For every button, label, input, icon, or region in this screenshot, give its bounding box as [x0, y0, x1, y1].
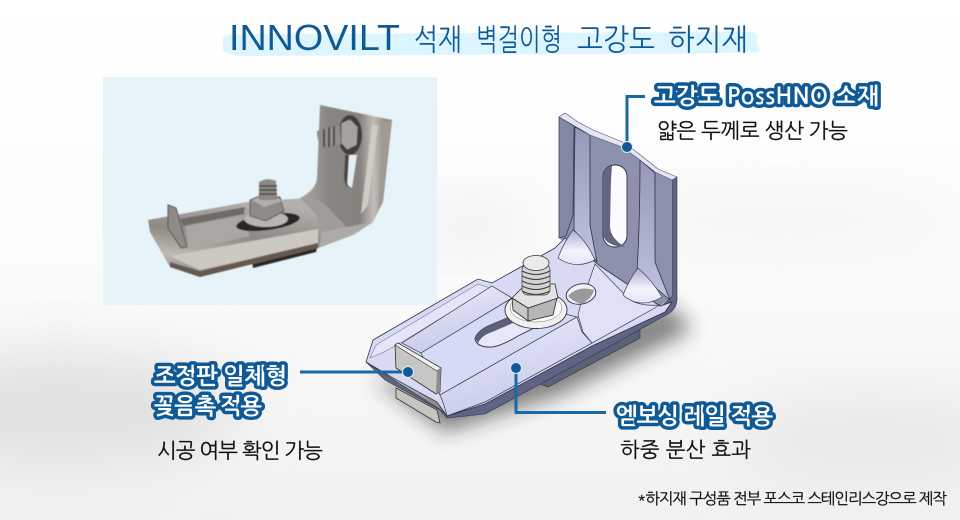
title text: 하지재 [668, 24, 748, 57]
gusset right [623, 268, 662, 303]
leader: top [622, 96, 645, 152]
upright plate [559, 117, 672, 306]
washer [505, 292, 567, 328]
photo: base washer and nut [244, 211, 288, 227]
rear under plate [540, 328, 640, 387]
inner left channel [574, 127, 597, 262]
callout heading: 조정판 일체형 [154, 364, 287, 388]
photo: base rear [300, 198, 353, 238]
photo: upright ribs [361, 124, 378, 214]
callout: adjustment tab [154, 364, 323, 462]
callout text: 얇은 두께로 생산 가능 [657, 120, 848, 142]
far edge band [370, 284, 490, 358]
photo: tab [168, 205, 187, 248]
title text: 벽걸이형 [476, 24, 562, 57]
lower rail [440, 317, 592, 416]
photo: front rail [170, 229, 318, 270]
centre flat [421, 298, 577, 395]
callout heading: 고강도 PossHNO 소재 [654, 84, 879, 108]
adjustment tab [395, 343, 441, 394]
inner right channel [637, 160, 670, 300]
title text: INNOVILT [229, 17, 400, 58]
title highlight [223, 32, 760, 56]
callout text: 하중 분산 효과 [620, 439, 751, 461]
photo: upper washer and nut [338, 115, 362, 155]
gusset left [558, 230, 595, 265]
footnote: *하지재 구성품 전부 포스코 스테인리스강으로 제작 [637, 491, 947, 507]
base slot [475, 316, 538, 347]
panel: product photo [103, 77, 437, 305]
bottom lip [396, 388, 440, 423]
callout text: 시공 여부 확인 가능 [157, 440, 323, 462]
upright top edge [559, 113, 677, 180]
photo: base bolt [259, 179, 277, 200]
photo: upright slot [344, 155, 357, 188]
photo: base slot [235, 210, 301, 234]
front bevel and side wall [366, 177, 677, 418]
title [223, 17, 760, 58]
upright slot [603, 165, 627, 247]
callout: adjustment tab: 꽂음촉 적용 [154, 394, 262, 418]
callout: top material [654, 84, 879, 142]
base round hole [564, 281, 598, 307]
photo: base plate [148, 198, 353, 277]
title text [229, 17, 748, 58]
base plate [366, 238, 672, 416]
leader: bottom [510, 362, 606, 412]
photo: underside plate [252, 244, 318, 268]
callout: embossed rail [616, 404, 773, 461]
callout heading: 엠보싱 레일 적용 [616, 404, 773, 428]
bracket shadow [372, 305, 692, 432]
photo: near rail shade [180, 207, 245, 226]
threaded bolt [522, 256, 550, 295]
hex nut [512, 284, 558, 321]
left strip [559, 117, 574, 238]
rear flat [578, 264, 660, 343]
panel: main bracket illustration [366, 113, 677, 423]
title text: 석재 [414, 24, 462, 57]
upper rail [402, 286, 512, 353]
leader: left [300, 366, 414, 378]
title text: 고강도 [577, 24, 655, 57]
photo: upright plate [300, 105, 392, 235]
photo: upper bolt [317, 125, 341, 147]
